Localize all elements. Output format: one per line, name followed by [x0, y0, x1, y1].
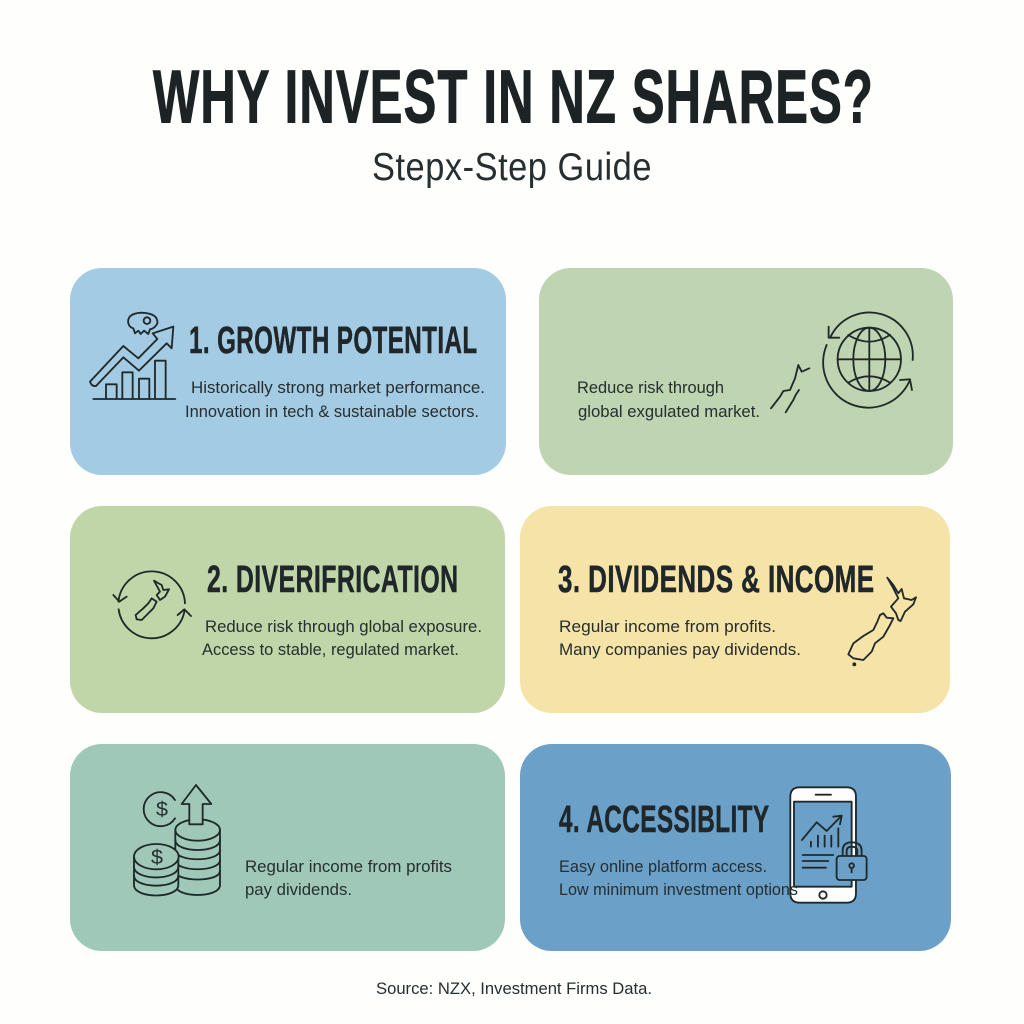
text: growth line 2: Innovation in tech & sustainable sectors. [185, 403, 479, 421]
panel: dividends and income [520, 506, 950, 713]
text: coins line 1: Regular income from profits [245, 858, 452, 876]
text: dividends line 1: Regular income from profits. [559, 618, 776, 636]
heading: growth potential: 1. GROWTH POTENTIAL [189, 320, 478, 362]
heading: diversification: 2. DIVERIFRICATION [207, 559, 458, 601]
panel: accessibility [520, 744, 951, 951]
text: global line 2: global exgulated market. [578, 403, 760, 421]
text: coins line 2: pay dividends. [245, 881, 352, 899]
icon: NZ with cycle arrows [113, 571, 191, 638]
panel: global exposure [539, 268, 953, 475]
panel: growth potential [70, 268, 506, 475]
source note: Source: NZX, Investment Firms Data. [376, 980, 652, 998]
icon: phone with chart and lock [790, 787, 867, 903]
icon label: dollar on loose coin: $ [156, 799, 168, 821]
text: diversification line 1: Reduce risk through global exposure. [205, 618, 482, 636]
icon label: dollar on stack: $ [151, 847, 163, 869]
text: global line 1: Reduce risk through [577, 379, 724, 397]
text: growth line 1: Historically strong market performance. [191, 379, 485, 397]
panel: income coins [70, 744, 505, 951]
text: diversification line 2: Access to stable, regulated market. [202, 641, 459, 659]
icon: NZ map outline [848, 578, 916, 665]
text: accessibility line 2: Low minimum investment options [559, 881, 798, 899]
heading: accessibility: 4. ACCESSIBLITY [559, 799, 770, 841]
text: accessibility line 1: Easy online platform access. [559, 858, 767, 876]
heading: dividends and income: 3. DIVIDENDS & INCOME [558, 559, 874, 601]
icon: growth chart [90, 313, 175, 399]
text: dividends line 2: Many companies pay dividends. [559, 641, 801, 659]
subtitle: Stepx-Step Guide [372, 146, 652, 189]
icon: globe with arrows [823, 312, 913, 408]
icon: small NZ map [771, 365, 809, 412]
icon: coin stacks with arrow [134, 785, 220, 895]
panel: diversification [70, 506, 505, 713]
